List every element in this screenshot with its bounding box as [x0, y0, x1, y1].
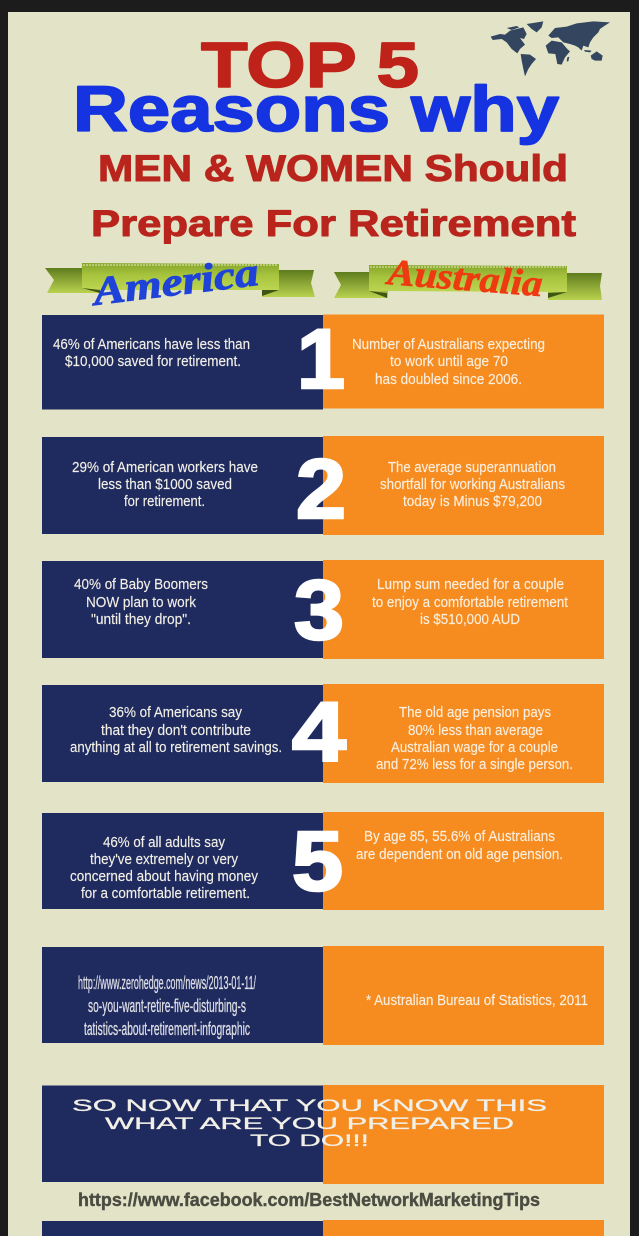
Australia text 2: today is Minus $79,200	[403, 494, 542, 510]
call to action text: WHAT ARE YOU PREPARED	[105, 1114, 514, 1133]
ribbon: America: America	[87, 249, 261, 314]
source link	[78, 973, 256, 1039]
Australia text 4: 80% less than average	[408, 723, 543, 739]
Australia text 3: Lump sum needed for a couple	[377, 577, 564, 593]
Australia text 1: Number of Australians expecting	[352, 337, 545, 353]
number 4: 4	[292, 685, 346, 779]
source note: * Australian Bureau of Statistics, 2011	[366, 993, 588, 1009]
title: TOP 5: TOP 5	[201, 29, 419, 101]
America text 2: for retirement.	[124, 494, 205, 510]
panel: reason 5	[42, 812, 604, 910]
heading: Prepare For Retirement: Prepare For Retirement	[91, 203, 576, 244]
America text 3: NOW plan to work	[86, 595, 197, 611]
Australia text 3: to enjoy a comfortable retirement	[372, 595, 568, 611]
number 3: 3	[294, 563, 344, 657]
America text 3: 40% of Baby Boomers	[74, 577, 208, 593]
Australia text 4: Australian wage for a couple	[391, 740, 558, 756]
panel: reason 3	[42, 560, 604, 659]
Australia text 4: and 72% less for a single person.	[376, 757, 573, 773]
number 1: 1	[297, 312, 345, 406]
America text 3: "until they drop".	[91, 612, 191, 628]
call to action text: SO NOW THAT YOU KNOW THIS	[72, 1096, 547, 1115]
America text 3	[74, 577, 208, 628]
call to action text: TO DO!!!	[250, 1131, 369, 1150]
panel: sources: http://www.zerohedge.com/news/2013-01-11/	[78, 973, 256, 993]
source link: tatistics-about-retirement-infographic	[84, 1019, 250, 1039]
ribbon: Australia	[334, 252, 602, 305]
Australia text 1: has doubled since 2006.	[375, 372, 522, 388]
panel: reason 1	[42, 312, 604, 410]
America text 2: 29% of American workers have	[72, 460, 258, 476]
America text 5	[70, 835, 259, 902]
Australia text 4: The old age pension pays	[399, 705, 551, 721]
number 2: 2	[296, 442, 346, 536]
panel: bottom strip	[42, 1220, 604, 1236]
Australia text 5: are dependent on old age pension.	[356, 847, 563, 863]
facebook URL: https://www.facebook.com/BestNetworkMarketingTips	[78, 1190, 540, 1210]
ribbon: Australia: Australia	[384, 252, 544, 305]
panel: reason 4	[42, 684, 604, 783]
America text 1	[53, 337, 250, 370]
ribbon: America	[45, 249, 315, 314]
America text 5: they've extremely or very	[90, 852, 239, 868]
America text 5: for a comfortable retirement.	[81, 886, 250, 902]
America text 5: concerned about having money	[70, 869, 259, 885]
title: Reasons why: Reasons why	[73, 73, 559, 145]
source link: so-you-want-retire-five-disturbing-s	[88, 996, 246, 1016]
America text 4: that they don't contribute	[101, 723, 251, 739]
Australia text 5	[356, 829, 563, 863]
Australia text 1	[352, 337, 545, 388]
icon: world map	[491, 21, 610, 76]
panel: reason 2	[42, 436, 604, 536]
America text 4	[70, 705, 282, 756]
Australia text 4	[376, 705, 573, 773]
Australia text 3: is $510,000 AUD	[420, 612, 520, 628]
America text 5: 46% of all adults say	[103, 835, 226, 851]
America text 1: 46% of Americans have less than	[53, 337, 250, 353]
panel: sources	[42, 946, 604, 1045]
America text 1: $10,000 saved for retirement.	[65, 354, 241, 370]
number 5: 5	[292, 814, 343, 908]
America text 4: anything at all to retirement savings.	[70, 740, 282, 756]
Australia text 2: shortfall for working Australians	[380, 477, 565, 493]
panel: call to action	[42, 1085, 604, 1184]
Australia text 1: to work until age 70	[390, 354, 508, 370]
America text 2: less than $1000 saved	[98, 477, 232, 493]
call to action text	[72, 1096, 547, 1150]
Australia text 2: The average superannuation	[388, 460, 556, 476]
America text 4: 36% of Americans say	[109, 705, 243, 721]
America text 2	[72, 460, 258, 510]
Australia text 2	[380, 460, 565, 510]
Australia text 3	[372, 577, 568, 628]
Australia text 5: By age 85, 55.6% of Australians	[364, 829, 555, 845]
heading: MEN & WOMEN Should: MEN & WOMEN Should	[98, 148, 568, 189]
